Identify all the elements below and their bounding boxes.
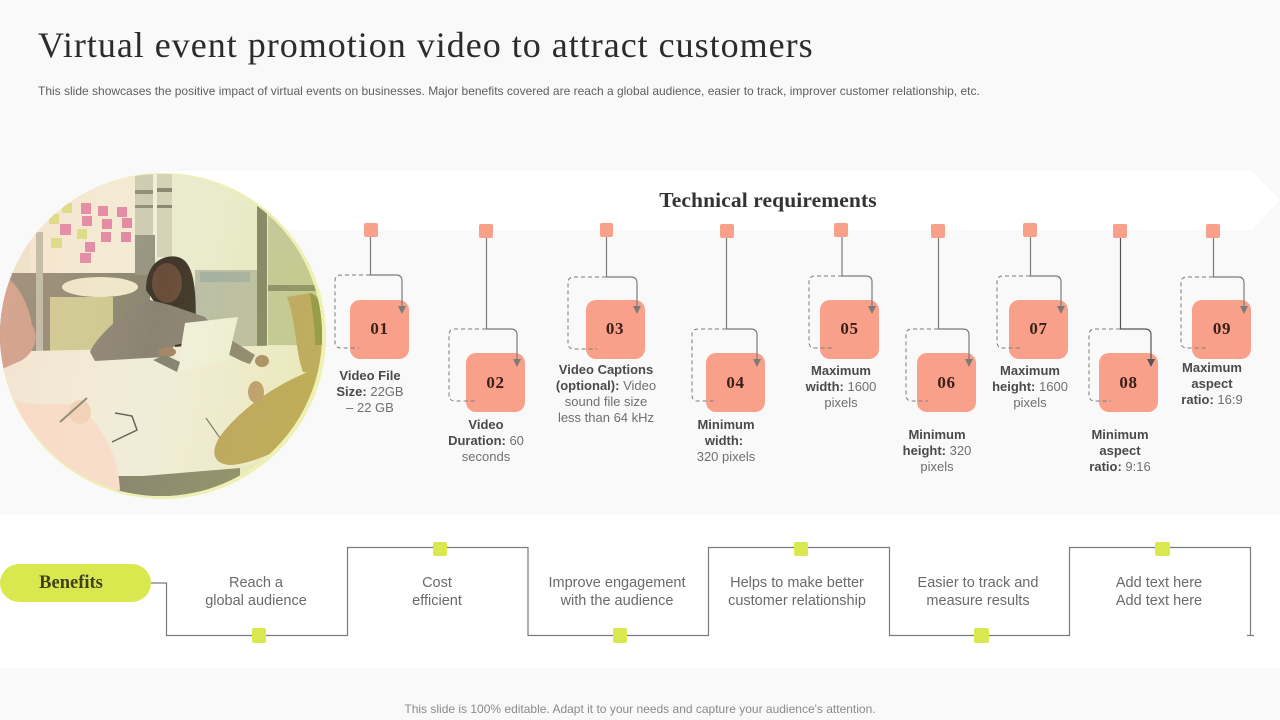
item 06: minimum height: pixels [920,459,954,474]
benefit: easier to track [918,575,1038,643]
item 03: video captions: 03 [606,319,624,338]
benefit: reach a global audience: global audience [205,593,307,609]
sticky notes [60,203,132,263]
item 06: minimum height: Minimum [908,427,966,442]
item 09: maximum aspect ratio: Maximum [1182,360,1242,375]
title: Virtual event promotion video to attract customers [38,25,814,65]
item 07: maximum height: Maximum [1000,363,1060,378]
item 04: minimum width [692,224,765,464]
benefit: cost efficient: Cost [422,575,452,591]
whiteboard with sticky notes [30,172,135,273]
item 03: video captions: sound file size [565,394,647,409]
item 03: video captions: Video Captions [559,362,653,377]
item 06: minimum height [903,224,976,474]
item 03: video captions [556,223,656,425]
benefit: improve engagement: Improve engagement [548,575,686,591]
item 02: video duration: Duration: 60 [448,433,524,448]
item 08: minimum aspect ratio [1089,224,1158,474]
benefit: easier to track: Easier to track and [918,575,1038,591]
stepped connector line [151,548,1254,636]
benefit: reach a global audience [205,575,307,643]
benefit: cost efficient [412,542,462,609]
item 04: minimum width: 320 pixels [697,449,756,464]
item 04: minimum width: 04 [726,373,745,392]
woman: hair back [146,256,196,347]
item 09: maximum aspect ratio [1181,224,1251,407]
item 09: maximum aspect ratio: 09 [1213,319,1231,338]
benefit: cost efficient: efficient [412,593,462,609]
item 08: minimum aspect ratio: aspect [1099,443,1141,458]
footer note: This slide is 100% editable. Adapt it to your needs and capture your audience's attention. [404,702,876,716]
item 09: maximum aspect ratio: ratio: 16:9 [1181,392,1243,407]
item 08: minimum aspect ratio: Minimum [1091,427,1149,442]
notebook and pen [60,398,87,422]
benefit: better customer relationship: customer relationship [728,593,866,609]
item 07: maximum height [992,223,1068,410]
item 05: maximum width: Maximum [811,363,871,378]
woman: face [152,263,182,303]
item 09: maximum aspect ratio: aspect [1191,376,1233,391]
benefit: improve engagement: with the audience [560,593,673,609]
benefits pill [0,564,151,602]
person right [214,368,318,465]
item 02: video duration: seconds [462,449,511,464]
photo: team meeting in a circle [0,170,330,500]
item 05: maximum width [805,223,879,410]
benefit: better customer relationship: Helps to make better [730,575,864,591]
benefit: add text here: Add text here [1116,575,1202,591]
benefit: improve engagement [548,575,686,643]
table [4,346,304,476]
item 03: video captions: (optional): Video [556,378,656,393]
item 08: minimum aspect ratio: ratio: 9:16 [1089,459,1151,474]
item 07: maximum height: height: 1600 [992,379,1068,394]
woman: sweater [90,300,255,364]
item 01: video file size: – 22 GB [346,400,394,415]
banner arrow: technical requirements: Technical requirements [659,188,877,212]
item 01: video file size [335,223,409,415]
benefit: better customer relationship [728,542,866,609]
person left [0,273,36,370]
item 07: maximum height: pixels [1013,395,1047,410]
woman: hands [255,355,269,367]
benefit: easier to track: measure results [926,593,1030,609]
item 04: minimum width: width: [704,433,743,448]
item 08: minimum aspect ratio: 08 [1119,373,1138,392]
item 06: minimum height: 06 [937,373,956,392]
item 05: maximum width: pixels [824,395,858,410]
item 02: video duration [448,224,525,464]
subtitle text: This slide showcases the positive impact of virtual events on businesses. Major benefits covered are reach a global audience, easier to track, improver customer relationship, etc. [38,84,980,98]
item 03: video captions: less than 64 kHz [558,410,654,425]
benefit: reach a global audience: Reach a [229,575,283,591]
item 05: maximum width: 05 [840,319,859,338]
item 01: video file size: Video File [339,368,401,383]
banner arrow: technical requirements [160,171,1280,230]
room behind [0,273,150,353]
item 06: minimum height: height: 320 [903,443,971,458]
item 04: minimum width: Minimum [697,417,755,432]
item 02: video duration: 02 [486,373,505,392]
panel: benefits band [0,515,1280,668]
item 01: video file size: Size: 22GB [336,384,404,399]
item 02: video duration: Video [468,417,504,432]
item 07: maximum height: 07 [1029,319,1048,338]
item 05: maximum width: width: 1600 [806,379,876,394]
benefit: add text here: Add text here [1116,593,1202,609]
benefits pill: Benefits [39,573,103,593]
benefit: add text here [1116,542,1202,609]
item 01: video file size: 01 [370,319,389,338]
laptop [181,317,238,355]
glass columns [135,174,153,235]
